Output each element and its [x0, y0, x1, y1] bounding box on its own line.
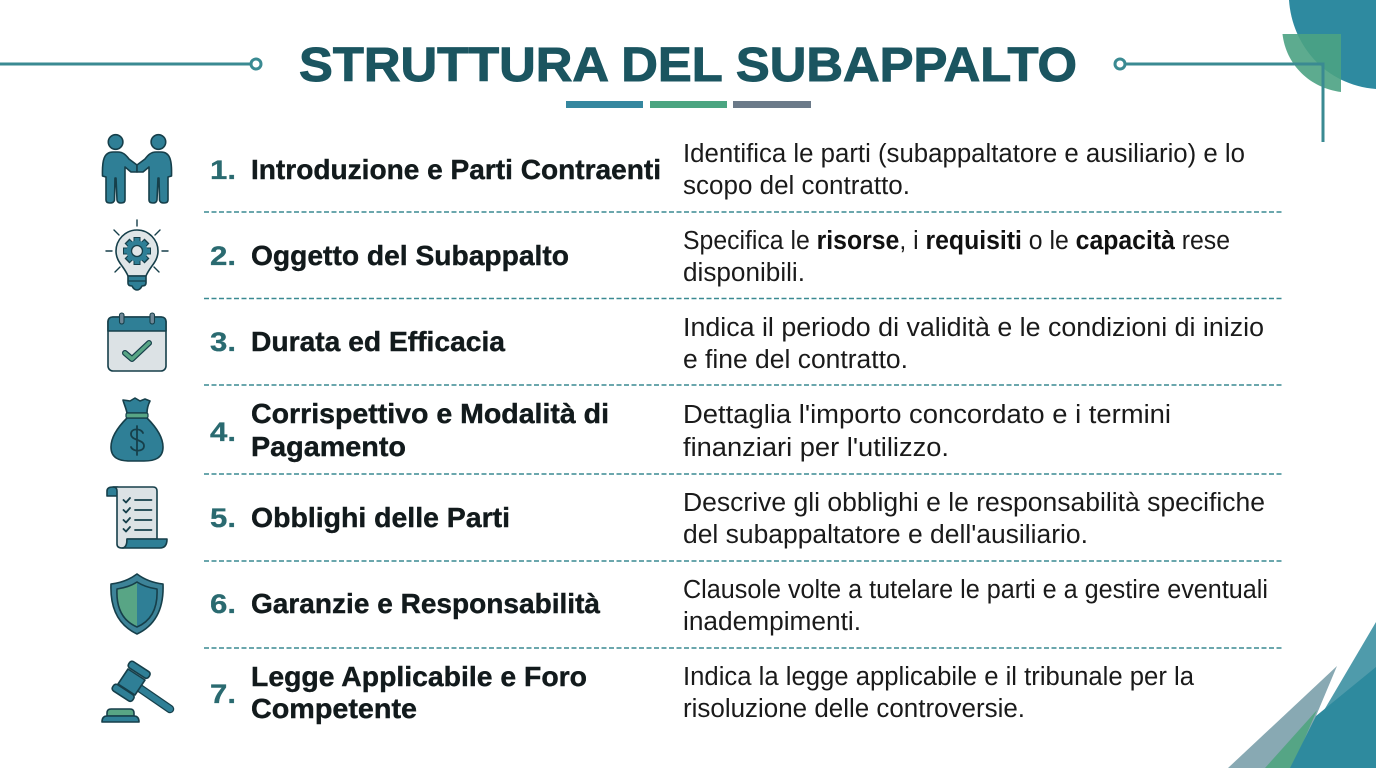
- icon: shield: [111, 574, 163, 634]
- heading 5: Obblighi delle Parti: [251, 502, 510, 533]
- icon: money bag: [111, 398, 163, 461]
- number 6: 6.: [210, 589, 236, 619]
- number 3: 3.: [210, 327, 236, 357]
- description 2: disponibili.: [683, 259, 805, 287]
- number 7: 7.: [210, 679, 236, 709]
- description 1: Identifica le parti (subappaltatore e ausiliario) e lo: [683, 140, 1245, 168]
- description 4: finanziari per l'utilizzo.: [683, 434, 949, 462]
- description 5: Descrive gli obblighi e le responsabilità specifiche: [683, 489, 1265, 517]
- heading 2: Oggetto del Subappalto: [251, 240, 569, 271]
- icon: light bulb with gear: [106, 220, 168, 290]
- title underline bars: [566, 101, 811, 108]
- number 5: 5.: [210, 503, 236, 533]
- heading 3: Durata ed Efficacia: [251, 326, 506, 357]
- description 2: [683, 227, 1230, 287]
- number 2: 2.: [210, 241, 236, 271]
- description 2: Specifica le risorse, i requisiti o le capacità rese: [683, 227, 1230, 255]
- description 3: [683, 314, 1264, 374]
- icon: checklist scroll: [107, 487, 167, 548]
- row 4: [111, 398, 1171, 462]
- heading 4: Corrispettivo e Modalità di: [251, 398, 609, 429]
- description 7: Indica la legge applicabile e il tribunale per la: [683, 663, 1195, 691]
- description 6: Clausole volte a tutelare le parti e a gestire eventuali: [683, 576, 1268, 604]
- title: STRUTTURA DEL SUBAPPALTO: [299, 39, 1077, 92]
- description 6: [683, 576, 1268, 636]
- description 1: [683, 140, 1245, 200]
- top right corner decoration: [1282, 0, 1376, 92]
- description 7: [683, 663, 1195, 723]
- icon: gavel: [102, 660, 170, 722]
- heading 1: Introduzione e Parti Contraenti: [251, 154, 661, 185]
- row 2: [106, 220, 1230, 290]
- description 7: risoluzione delle controversie.: [683, 695, 1025, 723]
- description 4: [683, 401, 1171, 462]
- row 5: [107, 487, 1265, 549]
- description 3: Indica il periodo di validità e le condizioni di inizio: [683, 314, 1264, 342]
- icon: calendar with check: [108, 313, 166, 371]
- number 4: 4.: [210, 417, 236, 447]
- number 1: 1.: [210, 155, 236, 185]
- description 6: inadempimenti.: [683, 608, 861, 636]
- bottom right corner decoration: [1228, 622, 1376, 768]
- heading 7: Legge Applicabile e Foro: [251, 661, 587, 692]
- description 1: scopo del contratto.: [683, 172, 910, 200]
- row 3: [108, 313, 1264, 374]
- heading 4: [251, 398, 609, 462]
- heading 4: Pagamento: [251, 431, 406, 462]
- heading 6: Garanzie e Responsabilità: [251, 588, 601, 619]
- row 6: [111, 574, 1268, 636]
- row 1: [102, 135, 1245, 203]
- description 5: [683, 489, 1265, 549]
- heading 7: Competente: [251, 693, 417, 724]
- heading 7: [251, 661, 587, 724]
- row 7: [102, 660, 1195, 724]
- description 3: e fine del contratto.: [683, 346, 908, 374]
- description 5: del subappaltatore e dell'ausiliario.: [683, 521, 1088, 549]
- title left connector: [0, 59, 261, 69]
- description 4: Dettaglia l'importo concordato e i termini: [683, 401, 1171, 429]
- title right connector: [1115, 59, 1323, 142]
- icon: handshake: [102, 135, 172, 203]
